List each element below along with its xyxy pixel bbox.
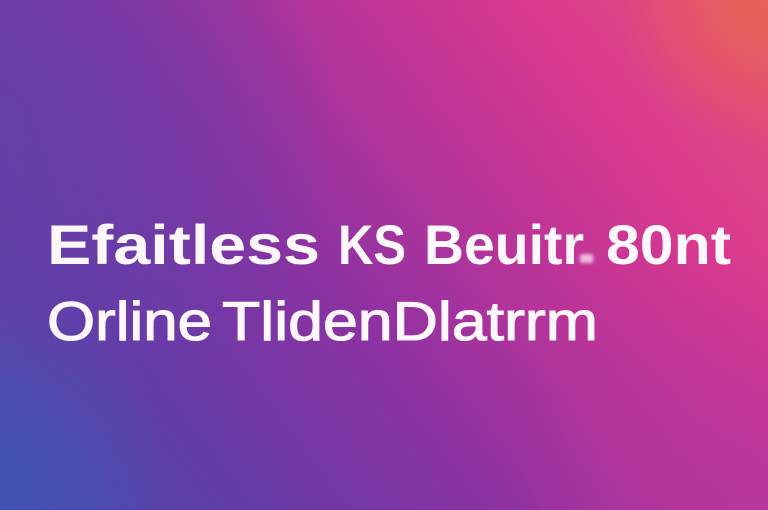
headline: KS bbox=[338, 213, 406, 276]
headline bbox=[47, 213, 731, 276]
smudge on headline bbox=[580, 254, 593, 263]
headline: 80nt bbox=[606, 213, 731, 276]
subheading: TlidenDlatrrm bbox=[222, 290, 598, 352]
subheading bbox=[47, 290, 598, 352]
headline: Efaitless bbox=[47, 213, 320, 276]
subheading: Orline bbox=[47, 290, 212, 352]
headline: Beuitr bbox=[424, 213, 584, 276]
